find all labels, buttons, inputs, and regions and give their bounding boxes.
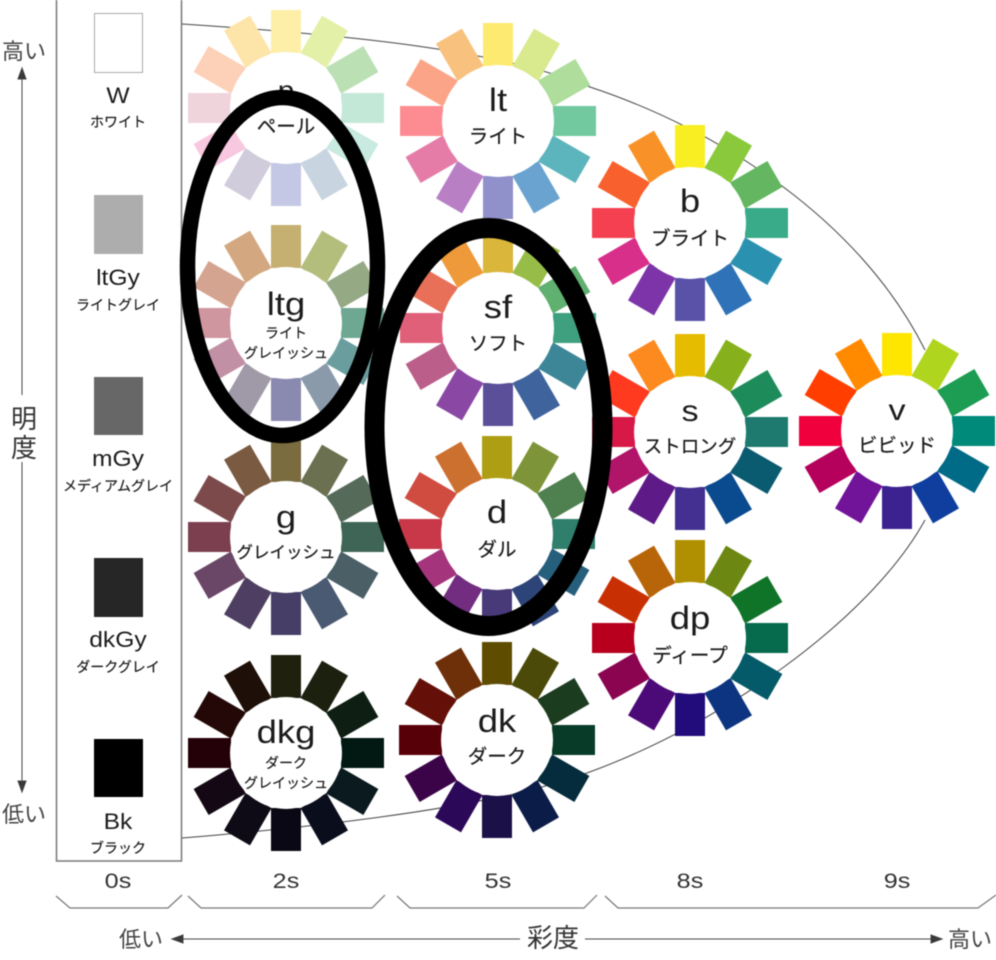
swatch: black [94,739,143,797]
wheel: b bright [592,125,788,321]
label: W [90,83,146,130]
wheel: v vivid [799,333,995,529]
wheel: p pale: ペール [257,116,315,138]
label: high lightness: 高い [2,39,46,64]
label: mGy: メディアムグレイ [63,478,173,494]
wheel: sf soft: ソフト [469,333,527,355]
wheel: dk dark: dk [478,704,517,739]
wheel: p pale: p [278,76,294,105]
wheel: d dull [399,436,595,632]
label: Bk: ブラック [90,840,146,856]
callout: left ellipse [188,98,378,436]
braces [56,895,996,908]
tone outline curve [182,24,925,838]
label: low saturation: 低い [119,927,163,952]
wheel: lt light: lt [489,83,508,118]
wheel: v vivid: v [888,393,906,427]
callout: right ellipse [374,228,602,626]
wheel: v vivid: ビビッド [858,435,936,457]
wheel: p pale [188,10,384,206]
axis: saturation [119,923,992,953]
wheel: sf soft [400,230,596,426]
wheel: lt light [400,23,596,219]
wheel: dkg dark grayish: グレイッシュ [244,775,328,791]
saturation values: 8s [677,869,703,893]
wheel: g grayish: g [276,500,296,535]
label: Bk [90,809,146,856]
label: lightness [11,404,37,463]
wheel: d dull: d [487,495,507,530]
wheel: ltg light grayish: ライト [265,325,307,341]
label: low lightness: 低い [2,802,46,827]
wheel: s strong: s [681,394,699,428]
wheel: dkg dark grayish: ダーク [265,755,307,771]
label: lightness: 度 [11,433,37,463]
panel: achromatic scale [56,0,182,861]
wheel: s strong [592,334,788,530]
label: dkGy: ダークグレイ [76,659,160,675]
wheel: b bright: b [680,184,700,219]
swatch: white [94,14,142,72]
wheel: dk dark: ダーク [468,746,526,768]
wheel: b bright: ブライト [651,227,729,250]
wheel: sf soft: sf [484,290,513,325]
label: Bk: Bk [104,809,133,834]
saturation values: 0s [105,869,131,893]
wheel: g grayish [188,439,384,635]
wheel: ltg light grayish: ltg [267,287,305,322]
saturation values [105,869,910,893]
label: W: W [106,83,130,108]
label: dkGy [76,627,160,675]
arrow: right [585,935,942,943]
saturation values: 9s [884,869,910,893]
wheel: dkg dark grayish [188,655,384,851]
axis: lightness [2,39,46,827]
label: ltGy: ltGy [96,265,140,290]
label: saturation: 彩度 [527,923,579,953]
label: dkGy: dkGy [89,627,147,652]
saturation values: 2s [273,869,299,893]
arrow: down [18,462,26,792]
wheel: lt light: ライト [469,126,527,148]
label: mGy: mGy [92,446,144,471]
wheel: d dull: ダル [477,539,517,561]
wheel: dp deep [592,540,788,736]
wheel: s strong: ストロング [644,436,736,457]
label: W: ホワイト [90,114,146,130]
label: ltGy: ライトグレイ [76,297,160,313]
wheel: dkg dark grayish: dkg [257,715,315,750]
wheel: g grayish: グレイッシュ [236,543,336,562]
arrow: up [18,68,26,395]
swatch: dark gray [94,558,143,617]
label: mGy [63,446,173,494]
label: high saturation: 高い [948,927,992,952]
wheel: dp deep: ディープ [652,645,728,667]
saturation values: 5s [485,869,511,893]
swatch: light gray [94,195,143,254]
wheel: dp deep: dp [670,601,710,636]
swatch: medium gray [94,377,143,435]
label: lightness: 明 [11,404,37,434]
arrow: left [172,935,520,943]
wheel: ltg light grayish: グレイッシュ [244,345,328,361]
wheel: ltg light grayish [188,225,384,421]
label: ltGy [76,265,160,313]
wheel: dk dark [399,642,595,838]
